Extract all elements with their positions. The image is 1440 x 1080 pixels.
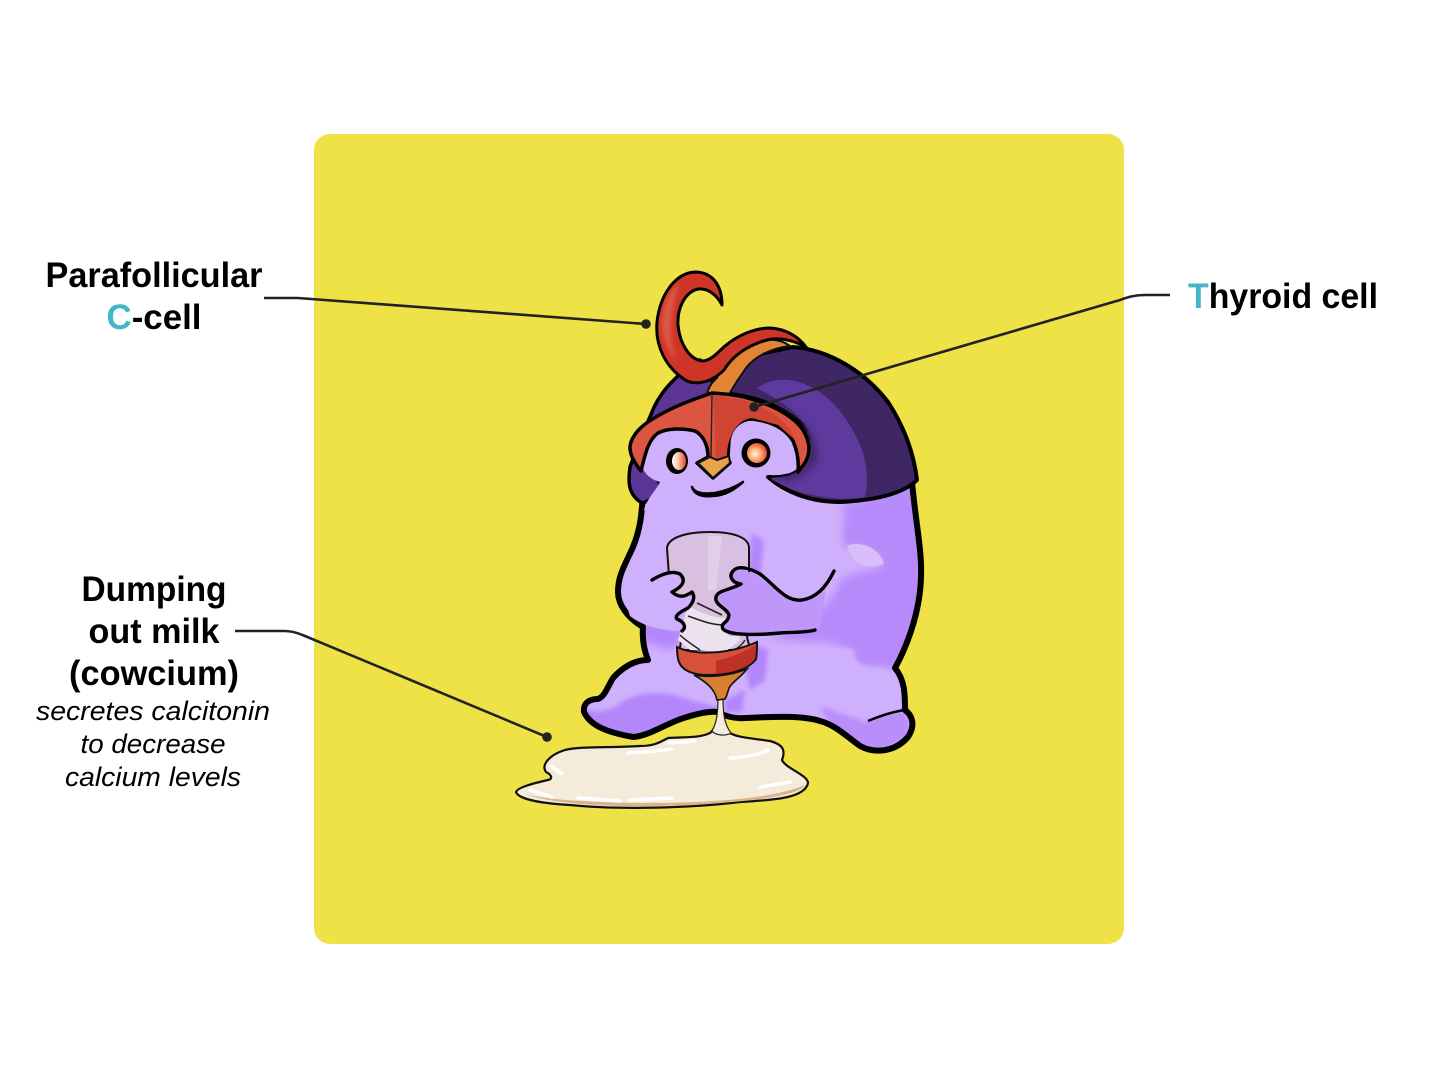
connector: dumping milk [235, 631, 552, 742]
right foot shade [820, 706, 910, 748]
label: Parafollicular C-cell: C-cell [106, 298, 202, 337]
infographic canvas [36, 134, 1376, 944]
head [640, 395, 810, 510]
left arm [622, 570, 694, 631]
panel: yellow background [314, 134, 1124, 944]
illustration: C-cell character [516, 272, 930, 808]
connector: C-cell [264, 298, 651, 329]
right side shade [774, 488, 918, 671]
right arm [715, 568, 826, 636]
hat [712, 347, 917, 502]
orange band [707, 340, 790, 397]
body [580, 480, 930, 760]
text block: calcitonin note: secretes calcitonin [36, 696, 270, 726]
connector: thyroid cell [749, 295, 1170, 412]
label: Dumping out milk (cowcium): out milk [88, 612, 220, 651]
smile [692, 482, 743, 496]
bottle nozzle [694, 669, 747, 700]
arms and hands [622, 568, 834, 636]
label: Dumping out milk (cowcium): (cowcium) [69, 654, 239, 693]
text block: calcitonin note [36, 696, 270, 792]
milk bottle [667, 532, 757, 700]
label: Parafollicular C-cell: Parafollicular [46, 256, 263, 295]
label: Parafollicular C-cell [46, 256, 263, 337]
hat and head [629, 272, 917, 510]
milk puddle [516, 715, 808, 808]
text block: calcitonin note: to decrease [80, 729, 226, 759]
left leg shade [587, 692, 717, 734]
label: Dumping out milk (cowcium): Dumping [82, 570, 226, 609]
text block: calcitonin note: calcium levels [65, 762, 241, 792]
red tendril forming the letter C [657, 272, 806, 383]
red visor [630, 393, 809, 478]
eyes [666, 438, 770, 474]
belly light under arm fade [842, 648, 885, 672]
label: Dumping out milk (cowcium) [69, 570, 239, 693]
left side shade under arm [644, 624, 680, 652]
milk stream [712, 698, 731, 735]
bottle cap [677, 642, 757, 675]
hat back [629, 360, 720, 503]
nose [698, 456, 730, 478]
label: Thyroid cell: Thyroid cell [1188, 277, 1378, 316]
